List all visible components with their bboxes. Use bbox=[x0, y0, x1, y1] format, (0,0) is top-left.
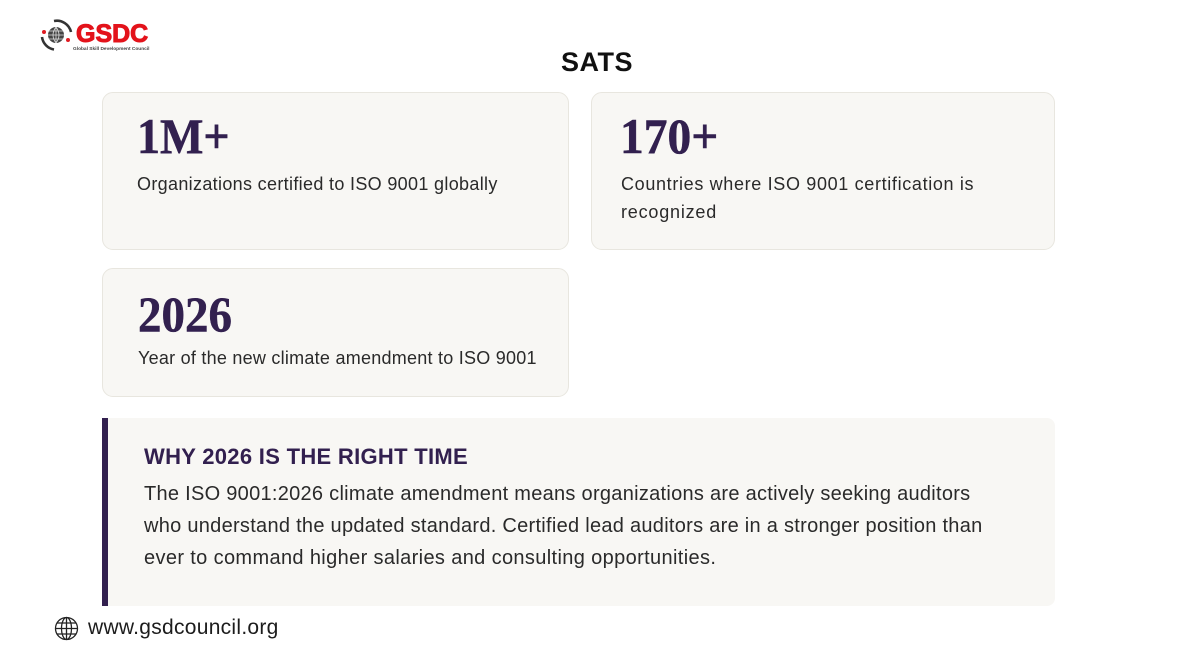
callout body: The ISO 9001:2026 climate amendment means organizations are actively seeking auditors bbox=[144, 483, 970, 505]
stat description: Organizations certified to ISO 9001 globally bbox=[137, 174, 498, 194]
stat number: 2026 bbox=[138, 286, 232, 342]
stat description: Countries where ISO 9001 certification is bbox=[621, 174, 974, 194]
callout body bbox=[144, 483, 983, 569]
icon: globe bbox=[54, 616, 78, 640]
panel: 1M+ stat bbox=[102, 92, 569, 250]
logo: GSDC bbox=[40, 19, 150, 52]
callout body: who understand the updated standard. Certified lead auditors are in a stronger position than bbox=[144, 515, 983, 537]
panel: 2026 stat bbox=[102, 268, 569, 397]
callout body: ever to command higher salaries and consulting opportunities. bbox=[144, 547, 716, 569]
footer: website bbox=[54, 616, 279, 640]
icon: logo globe bbox=[40, 19, 72, 51]
stat number: 1M+ bbox=[137, 108, 230, 164]
panel: 170+ stat bbox=[591, 92, 1055, 250]
callout accent bar bbox=[102, 418, 108, 606]
stat description: recognized bbox=[621, 202, 717, 222]
panel: why 2026 callout bbox=[102, 418, 1055, 606]
stat description bbox=[621, 174, 974, 222]
logo tagline: Global Skill Development Council bbox=[73, 47, 150, 52]
website url: www.gsdcouncil.org bbox=[88, 616, 279, 639]
logo wordmark: GSDC bbox=[76, 20, 148, 48]
callout heading: WHY 2026 IS THE RIGHT TIME bbox=[144, 444, 468, 469]
stat description: Year of the new climate amendment to ISO 9001 bbox=[138, 348, 537, 368]
stat number: 170+ bbox=[620, 108, 718, 164]
title: SATS bbox=[561, 47, 633, 77]
